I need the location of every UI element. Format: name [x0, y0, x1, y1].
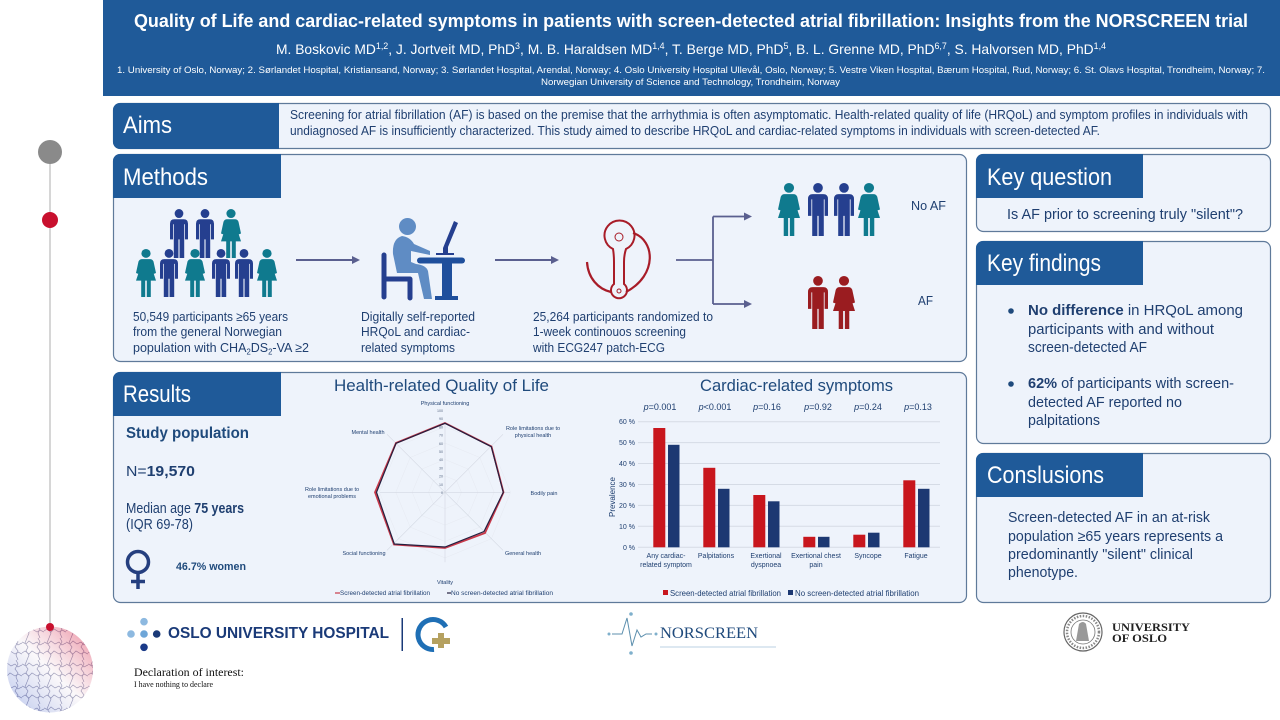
digital text: HRQoL and cardiac- [361, 324, 470, 339]
bar chart: p<0.001 [698, 402, 731, 412]
logo: University of Oslo [1064, 613, 1191, 651]
arrow [495, 256, 559, 264]
radar chart: 20 [439, 474, 443, 478]
methods heading: Methods [123, 164, 208, 191]
bar chart: Exertional [750, 553, 782, 560]
conclusions heading [976, 453, 1143, 497]
finding 1 [1008, 303, 1243, 356]
key question heading: Key question [987, 164, 1112, 191]
declaration of interest: I have nothing to declare [134, 679, 213, 689]
authors: 1,2 [376, 41, 388, 51]
radar chart: 10 [439, 483, 443, 487]
bar chart: Exertional chest [791, 553, 841, 560]
bar chart: 30 % [619, 482, 635, 489]
authors: , B. L. Grenne MD, PhD [788, 41, 934, 57]
bar chart: Syncope [854, 553, 882, 560]
results heading: Results [123, 381, 191, 408]
bar chart: Palpitations [698, 553, 735, 560]
conclusions text: population ≥65 years represents a [1008, 529, 1224, 545]
declaration of interest: Declaration of interest: [134, 665, 244, 679]
finding 2: 62% of participants with screen- [1028, 376, 1234, 392]
affiliations: Norwegian University of Science and Technology, Trondheim, Norway [541, 77, 840, 88]
radar chart: 90 [439, 417, 443, 421]
bar chart: Screen-detected atrial fibrillation [670, 589, 781, 598]
bar chart: p=0.92 [803, 402, 832, 412]
key question text: Is AF prior to screening truly "silent"? [1007, 207, 1243, 223]
panel: key findings [976, 241, 1270, 444]
bar chart: Prevalence [608, 476, 617, 517]
affiliations [117, 65, 1265, 88]
radar chart: Physical functioning [421, 401, 469, 407]
radar chart: 40 [439, 458, 443, 462]
sample size: N=19,570 [126, 464, 195, 480]
ECG text: 25,264 participants randomized to [533, 309, 713, 324]
bar chart: p=0.13 [903, 402, 932, 412]
key question heading [976, 154, 1143, 198]
logo: University of Oslo: UNIVERSITY [1112, 622, 1191, 634]
radar chart: Vitality [437, 580, 453, 586]
key findings heading: Key findings [987, 250, 1101, 277]
radar chart [305, 401, 560, 597]
conclusions heading: Conslusions [987, 462, 1104, 489]
women share: 46.7% women [176, 561, 246, 573]
title: Quality of Life and cardiac-related symptoms in patients with screen-detected atrial fibrillation: Insights from the NORSCREEN trial [134, 11, 1248, 31]
authors: M. Boskovic MD [276, 41, 377, 57]
population text: -VA ≥2 [272, 340, 309, 355]
population text: population with CHA [133, 340, 251, 355]
authors: 1,4 [1094, 41, 1106, 51]
aims heading [113, 103, 279, 149]
panel: results [113, 372, 966, 602]
radar chart: 80 [439, 426, 443, 430]
conclusions text [1008, 510, 1224, 581]
finding 1: participants with and without [1028, 322, 1214, 338]
radar chart: 50 [439, 450, 443, 454]
logo: University of Oslo: OF OSLO [1112, 633, 1167, 645]
population text: DS [251, 340, 268, 355]
arrow [296, 256, 360, 264]
panel: methods [113, 154, 966, 362]
finding 1: No difference in HRQoL among [1028, 303, 1243, 319]
authors: , S. Halvorsen MD, PhD [947, 41, 1094, 57]
radar chart: physical health [515, 433, 551, 439]
panel: conclusions [976, 453, 1270, 602]
finding 1: screen-detected AF [1028, 340, 1147, 356]
population text: 2 [268, 348, 273, 356]
declaration of interest [134, 665, 244, 689]
radar chart: 100 [437, 409, 443, 413]
conclusions text: Screen-detected AF in an at-risk [1008, 510, 1211, 526]
bar chart title: Cardiac-related symptoms [700, 376, 893, 395]
median age [126, 501, 244, 533]
bar chart: Any cardiac- [647, 553, 686, 560]
bar chart: 50 % [619, 440, 635, 447]
icon: vascular globe [7, 623, 93, 713]
icon: no AF group [778, 183, 880, 236]
radar chart: No screen-detected atrial fibrillation [451, 590, 553, 597]
bar chart: 10 % [619, 524, 635, 531]
methods heading [113, 154, 281, 198]
aims text [290, 107, 1248, 138]
study population heading: Study population [126, 425, 249, 442]
ECG text: with ECG247 patch-ECG [532, 340, 665, 355]
radar chart: 70 [439, 434, 443, 438]
conclusions text: phenotype. [1008, 565, 1078, 581]
icon: person at computer [384, 218, 465, 300]
median age: (IQR 69-78) [126, 517, 193, 533]
results heading [113, 372, 281, 416]
finding 2: detected AF reported no [1028, 395, 1182, 411]
digital text [361, 309, 475, 355]
population text [133, 309, 309, 356]
aims text: undiagnosed AF is insufficiently characterized. This study aimed to describe HRQoL and cardiac-related symptoms in individuals with screen-detected AF. [290, 123, 1100, 138]
logo: Oslo University Hospital [127, 618, 450, 651]
icon: ECG patch [587, 220, 650, 298]
bar chart: No screen-detected atrial fibrillation [795, 589, 919, 598]
radar chart: 30 [439, 466, 443, 470]
authors: 6,7 [934, 41, 947, 51]
bar chart: 40 % [619, 461, 635, 468]
radar chart: Role limitations due to [305, 487, 359, 493]
radar chart: Role limitations due to [506, 426, 560, 432]
header banner [103, 0, 1280, 96]
bar chart: related symptom [640, 562, 692, 569]
label: AF: AF [918, 293, 933, 308]
bar chart: pain [809, 562, 823, 569]
logo: Oslo University Hospital: OSLO UNIVERSITY HOSPITAL [168, 625, 389, 642]
logo: NORSCREEN [608, 612, 776, 655]
branching arrow [676, 212, 752, 308]
panel: key question [976, 154, 1270, 232]
bar chart: p=0.16 [752, 402, 781, 412]
radar chart: emotional problems [308, 494, 356, 500]
key findings heading [976, 241, 1143, 285]
bar chart: dyspnoea [751, 562, 781, 569]
conclusions text: predominantly "silent" clinical [1008, 547, 1193, 563]
authors: , T. Berge MD, PhD [665, 41, 783, 57]
icon: female symbol [128, 552, 148, 589]
affiliations: 1. University of Oslo, Norway; 2. Sørlandet Hospital, Kristiansand, Norway; 3. Sørlandet Hospital, Arendal, Norway; 4. Oslo University Hospital Ullevål, Oslo, Norway; 5. Vestre Viken Hospital, Bærum Hospital, Rud, Norway; 6. St. Olavs Hospital, Trondheim, Norway; 7. [117, 65, 1265, 76]
radar chart: Bodily pain [531, 491, 557, 497]
radar chart: Mental health [351, 430, 385, 436]
logo: NORSCREEN: NORSCREEN [660, 625, 758, 642]
icon: AF group [808, 276, 855, 329]
authors: 3 [515, 41, 520, 51]
radar chart: 0 [441, 491, 443, 495]
authors: 1,4 [652, 41, 665, 51]
authors: , M. B. Haraldsen MD [520, 41, 652, 57]
icon: population group [136, 209, 277, 297]
population text: 50,549 participants ≥65 years [133, 309, 288, 324]
finding 2: palpitations [1028, 413, 1100, 429]
radar chart: 60 [439, 442, 443, 446]
bar chart: 60 % [619, 419, 635, 426]
radar chart: General health [505, 551, 541, 557]
population text: 2 [246, 348, 251, 356]
finding 2 [1008, 376, 1234, 429]
bar chart: p=0.001 [643, 402, 676, 412]
panel: aims [113, 103, 1270, 149]
label: no AF: No AF [911, 198, 946, 213]
digital text: Digitally self-reported [361, 309, 475, 324]
aims heading: Aims [123, 112, 172, 139]
authors: 5 [783, 41, 788, 51]
bar chart: p=0.24 [853, 402, 882, 412]
median age: Median age 75 years [126, 501, 244, 517]
radar title: Health-related Quality of Life [334, 376, 549, 395]
ECG text: 1-week continouos screening [533, 324, 686, 339]
bar chart [608, 402, 940, 598]
bar chart: 20 % [619, 503, 635, 510]
ECG text [532, 309, 713, 355]
digital text: related symptoms [361, 340, 455, 355]
radar chart: Screen-detected atrial fibrillation [340, 590, 430, 597]
bar chart: Fatigue [904, 553, 928, 560]
authors: , J. Jortveit MD, PhD [388, 41, 515, 57]
timeline decoration [38, 140, 62, 628]
bar chart: 0 % [623, 545, 635, 552]
population text: from the general Norwegian [133, 324, 282, 339]
radar chart: Social functioning [342, 551, 386, 557]
